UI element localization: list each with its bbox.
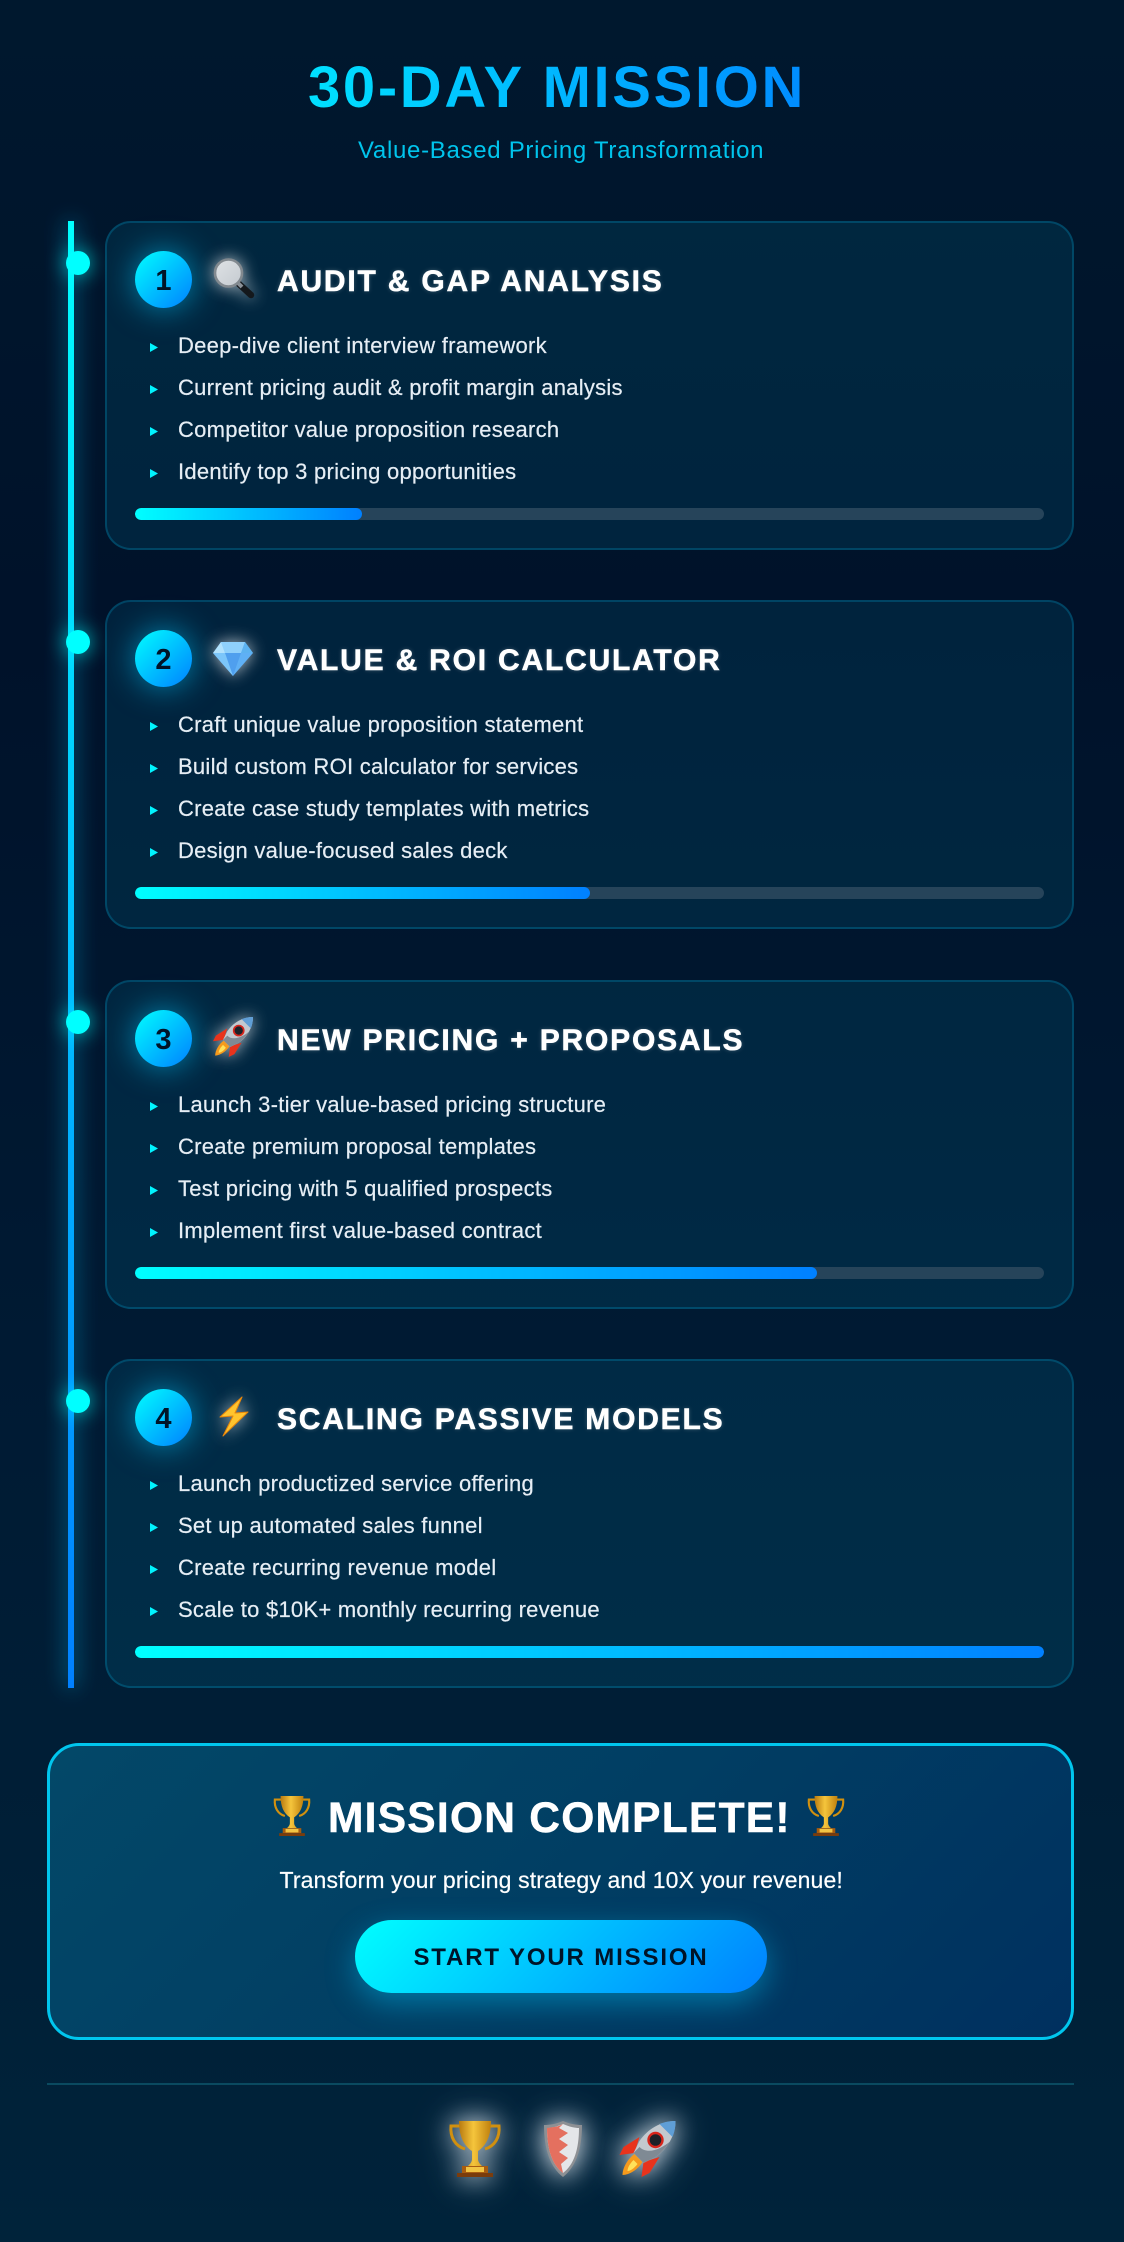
icon: shield bbox=[522, 2100, 604, 2194]
timeline dot 4 bbox=[66, 1389, 90, 1413]
progress bar 50% bbox=[135, 887, 1044, 899]
step number 1 bbox=[135, 251, 192, 308]
list item: Competitor value proposition research bbox=[178, 417, 559, 442]
timeline dot 3 bbox=[66, 1010, 90, 1034]
icon: lightning bolt bbox=[213, 1392, 255, 1441]
step number 4 bbox=[135, 1389, 192, 1446]
timeline dot 2 bbox=[66, 630, 90, 654]
step number 3 bbox=[135, 1010, 192, 1067]
panel: step 3 new pricing and proposals bbox=[105, 980, 1074, 1309]
button: START YOUR MISSION bbox=[413, 1944, 709, 1971]
icon: trophy right bbox=[808, 1796, 844, 1836]
icon: trophy bbox=[431, 2098, 518, 2200]
progress bar 75% bbox=[135, 1267, 1044, 1279]
timeline dot 1 bbox=[66, 251, 90, 275]
icon: gem bbox=[204, 630, 262, 684]
step heading: NEW PRICING + PROPOSALS bbox=[277, 1024, 744, 1057]
step heading: SCALING PASSIVE MODELS bbox=[277, 1403, 724, 1436]
panel: step 2 value and roi calculator bbox=[105, 600, 1074, 929]
subtitle: Value-Based Pricing Transformation bbox=[358, 137, 764, 164]
list item: Create premium proposal templates bbox=[178, 1134, 536, 1159]
panel: mission complete call to action bbox=[47, 1743, 1074, 2040]
timeline line bbox=[68, 221, 74, 1688]
list item: Design value-focused sales deck bbox=[178, 838, 508, 863]
list item: Scale to $10K+ monthly recurring revenue bbox=[178, 1597, 600, 1622]
completion message: Transform your pricing strategy and 10X your revenue! bbox=[280, 1867, 843, 1893]
divider bbox=[47, 2083, 1074, 2085]
list item: Set up automated sales funnel bbox=[178, 1513, 483, 1538]
panel: step 4 scaling passive models bbox=[105, 1359, 1074, 1688]
icon: rocket bbox=[205, 1007, 263, 1066]
list item: Implement first value-based contract bbox=[178, 1218, 542, 1243]
step number 4: 4 bbox=[155, 1403, 172, 1435]
title: 30-DAY MISSION bbox=[308, 55, 806, 120]
list item: Launch productized service offering bbox=[178, 1471, 534, 1496]
step heading: AUDIT & GAP ANALYSIS bbox=[277, 265, 664, 298]
list item: Create recurring revenue model bbox=[178, 1555, 496, 1580]
icon: rocket bbox=[602, 2101, 696, 2196]
progress bar 25% bbox=[135, 508, 1044, 520]
step number 1: 1 bbox=[155, 265, 172, 297]
step heading: VALUE & ROI CALCULATOR bbox=[277, 644, 722, 677]
button bbox=[355, 1920, 767, 1993]
list item: Current pricing audit & profit margin analysis bbox=[178, 375, 623, 400]
list item: Build custom ROI calculator for services bbox=[178, 754, 578, 779]
list item: Craft unique value proposition statement bbox=[178, 712, 583, 737]
completion heading: MISSION COMPLETE! bbox=[328, 1795, 791, 1842]
step number 2 bbox=[135, 630, 192, 687]
list item: Identify top 3 pricing opportunities bbox=[178, 459, 516, 484]
list item: Deep-dive client interview framework bbox=[178, 333, 547, 358]
list item: Launch 3-tier value-based pricing structure bbox=[178, 1092, 606, 1117]
list item: Test pricing with 5 qualified prospects bbox=[178, 1176, 553, 1201]
step number 3: 3 bbox=[155, 1024, 172, 1056]
icon: trophy left bbox=[274, 1796, 310, 1836]
step number 2: 2 bbox=[155, 644, 172, 676]
progress bar 100% bbox=[135, 1646, 1044, 1658]
list item: Create case study templates with metrics bbox=[178, 796, 589, 821]
icon: magnifying glass bbox=[202, 247, 262, 306]
panel: step 1 audit and gap analysis bbox=[105, 221, 1074, 550]
